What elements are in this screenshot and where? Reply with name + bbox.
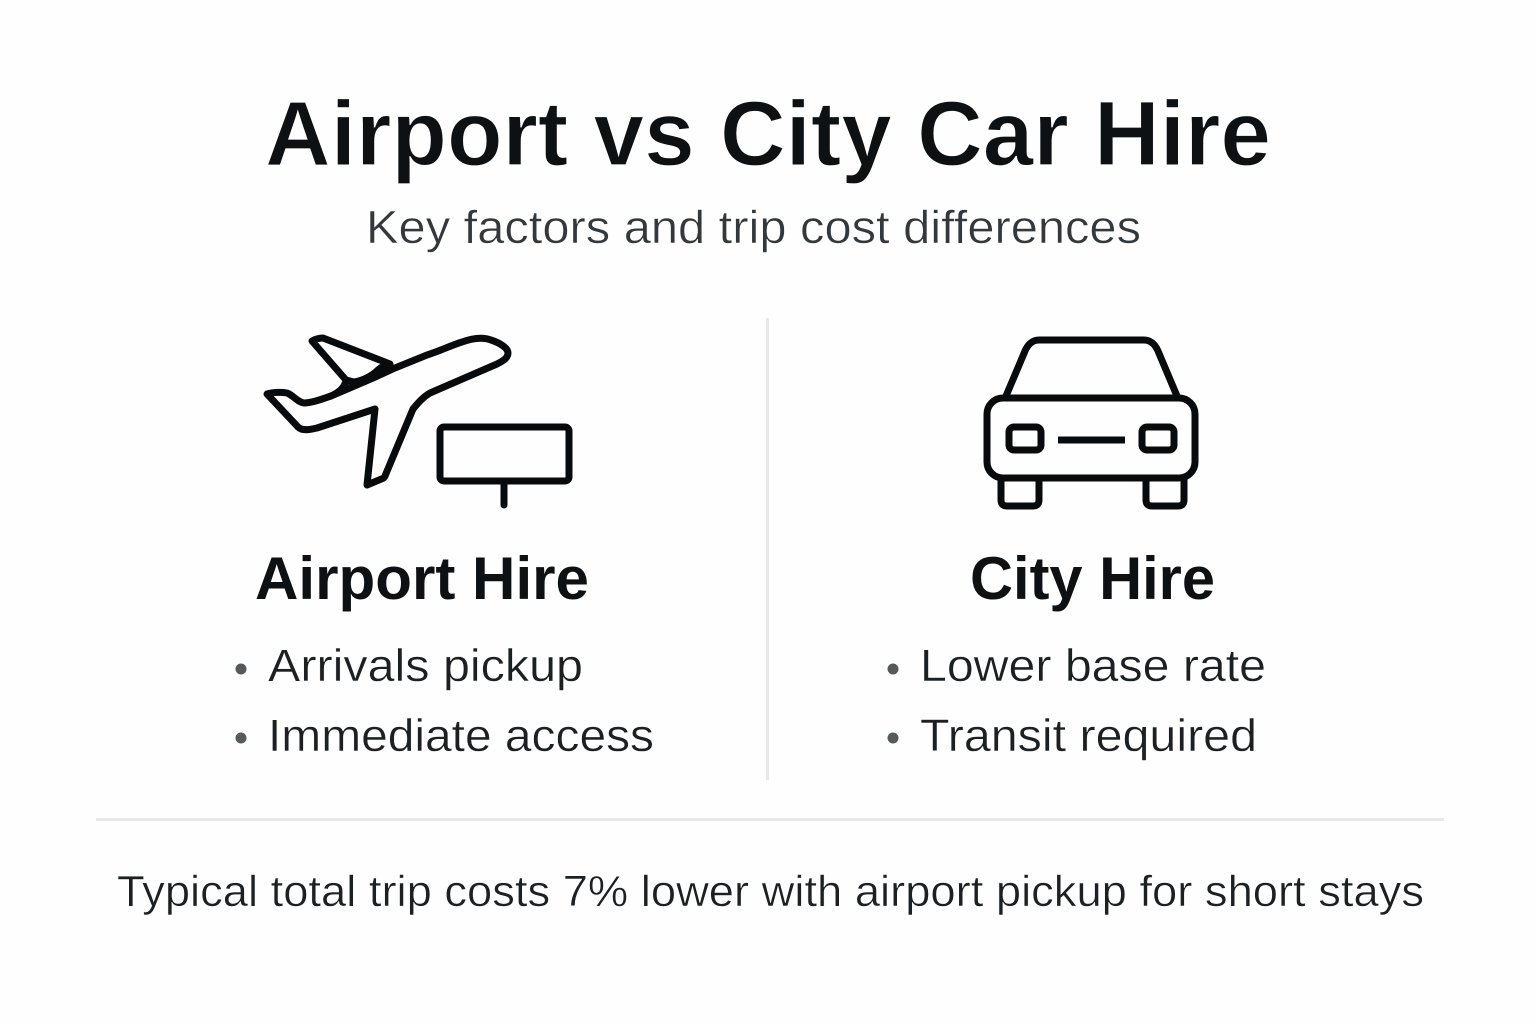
bullet list: city hire: Transit required (920, 710, 1257, 761)
icon: car (987, 340, 1195, 506)
title: Airport vs City Car Hire (265, 83, 1271, 185)
bullet list: airport hire: Arrivals pickup (268, 640, 583, 691)
bullet list: airport hire: Immediate access (268, 710, 654, 761)
panel: airport hire (236, 338, 654, 761)
bullet list: city hire (888, 640, 1266, 761)
icon: airplane (267, 338, 508, 485)
heading: airport hire: Airport Hire (255, 545, 589, 612)
subtitle: Key factors and trip cost differences (366, 201, 1141, 253)
heading: city hire: City Hire (970, 545, 1215, 612)
bullet list: city hire: Lower base rate (920, 640, 1266, 691)
vertical divider (766, 318, 769, 780)
icon: sign board (440, 427, 569, 505)
panel: city hire (888, 340, 1266, 761)
footer note: Typical total trip costs 7% lower with airport pickup for short stays (117, 867, 1424, 916)
bullet list: airport hire (236, 640, 654, 761)
horizontal divider (96, 818, 1444, 821)
